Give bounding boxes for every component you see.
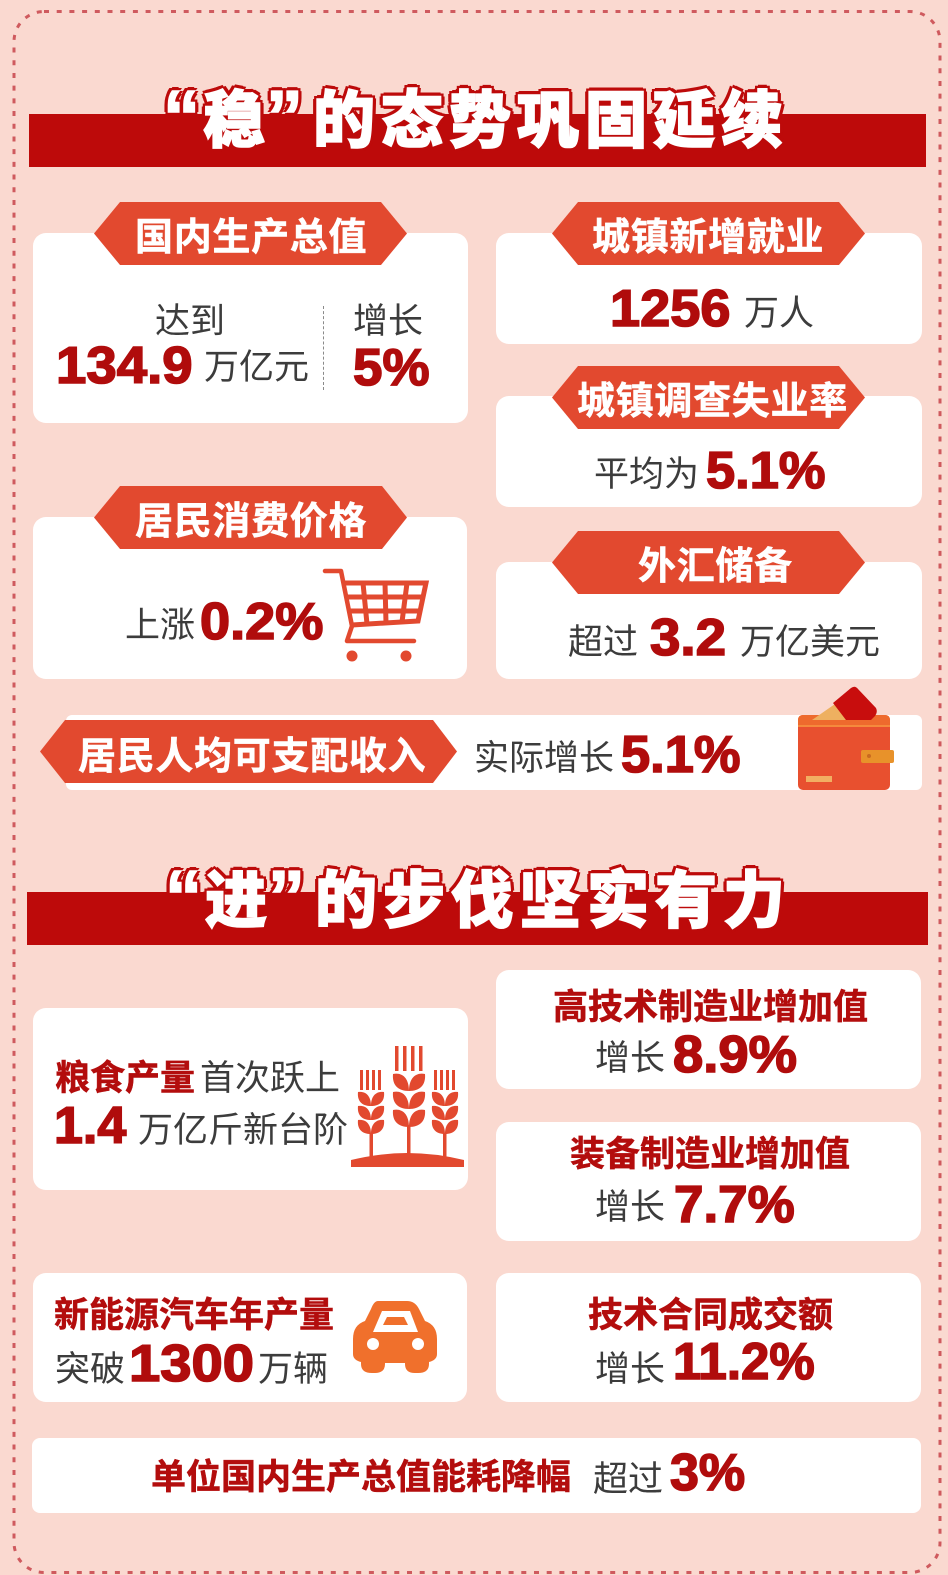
section heading: 稳: “稳”的态势巩固延续 [163,70,789,160]
text: 万亿斤新台阶: 万亿斤新台阶 [138,1102,348,1152]
panel: 外汇储备 [496,562,922,679]
panel: 城镇新增就业 [496,233,922,344]
number: 1256: 1256 [610,280,730,338]
text: 高技术制造业增加值: 高技术制造业增加值 [553,978,868,1030]
ribbon: 外汇储备 [552,531,865,594]
ribbon label: 居民人均可支配收入: 居民人均可支配收入 [78,724,426,780]
text: 突破: 突破 [55,1340,125,1392]
text: 实际增长: 实际增长 [474,730,614,780]
number: 11.2%: 11.2% [673,1332,815,1390]
ribbon: 国内生产总值 [94,202,407,265]
panel: 居民消费价格 [33,517,467,679]
panel: 装备制造业增加值 [496,1122,921,1241]
text: 万亿元: 万亿元 [204,338,309,390]
number: 134.9: 134.9 [56,336,193,394]
ribbon: 居民人均可支配收入 [40,720,457,783]
number: 1300: 1300 [129,1334,254,1392]
icon: shopping cart [322,568,430,662]
text: 平均为: 平均为 [594,446,699,496]
text: 增长: 增长 [353,292,423,344]
ribbon: 城镇新增就业 [552,202,865,265]
text: 新能源汽车年产量: 新能源汽车年产量 [54,1286,334,1338]
icon: wallet [798,686,894,790]
text: 超过: 超过 [568,614,638,664]
ribbon: 城镇调查失业率 [552,366,865,429]
number: 3%: 3% [670,1444,745,1502]
ribbon label: 外汇储备: 外汇储备 [638,534,793,590]
icon: wheat [351,1046,464,1167]
section banner: 稳 [29,114,926,167]
number: 1.4: 1.4 [54,1096,126,1154]
ribbon label: 城镇新增就业: 城镇新增就业 [592,206,824,260]
text: 装备制造业增加值: 装备制造业增加值 [570,1126,850,1176]
text: 增长: 增长 [595,1340,665,1392]
ribbon label: 居民消费价格: 居民消费价格 [135,490,367,544]
number: 7.7%: 7.7% [674,1176,795,1234]
text: 首次跃上: 首次跃上 [200,1050,340,1100]
panel: 粮食产量 [33,1008,468,1190]
text: 粮食产量: 粮食产量 [55,1050,195,1100]
text: 万辆: 万辆 [258,1340,328,1392]
section heading: 进: “进”的步伐坚实有力 [165,850,791,940]
number: 5%: 5% [353,338,430,396]
text: 单位国内生产总值能耗降幅: 单位国内生产总值能耗降幅 [151,1448,571,1500]
panel: 单位国内生产总值能耗降幅 [32,1438,921,1513]
panel: 技术合同成交额 [496,1273,921,1402]
number: 8.9%: 8.9% [673,1026,797,1084]
icon: car [353,1301,437,1373]
text: 增长: 增长 [595,1178,665,1230]
panel: 城镇调查失业率 [496,396,922,507]
panel: 国内生产总值 [33,233,468,423]
number: 0.2%: 0.2% [200,592,323,650]
text: 达到: 达到 [155,292,225,344]
text: 增长: 增长 [595,1030,665,1080]
number: 5.1%: 5.1% [706,442,825,500]
text: 万人: 万人 [744,284,814,336]
panel: 居民人均可支配收入 [66,715,922,790]
panel: 高技术制造业增加值 [496,970,921,1089]
text: 上涨: 上涨 [125,596,195,648]
divider [323,306,324,390]
ribbon label: 城镇调查失业率: 城镇调查失业率 [577,370,848,424]
number: 3.2: 3.2 [650,608,726,666]
number: 5.1%: 5.1% [621,726,740,784]
text: 超过: 超过 [593,1450,663,1502]
ribbon: 居民消费价格 [94,486,407,549]
panel: 新能源汽车 [33,1273,467,1402]
text: 万亿美元: 万亿美元 [740,614,880,664]
section banner: 进 [27,892,928,945]
text: 技术合同成交额: 技术合同成交额 [588,1286,833,1338]
ribbon label: 国内生产总值: 国内生产总值 [135,206,367,260]
